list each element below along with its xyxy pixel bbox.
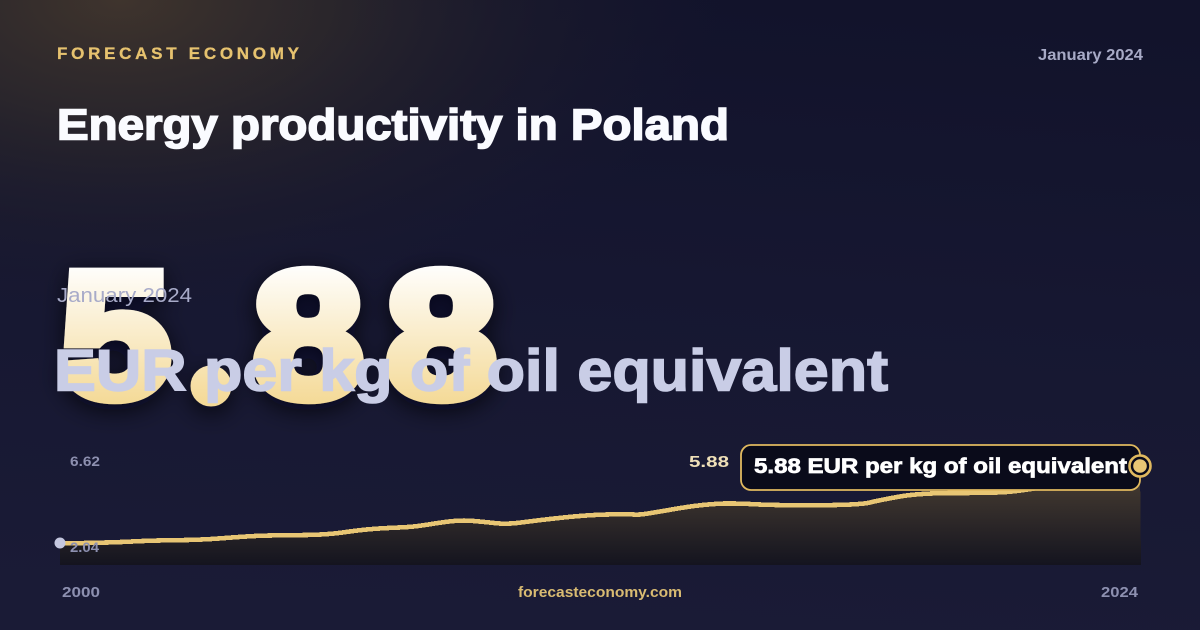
big value: 5 [60,235,171,436]
callout [741,445,1140,490]
x axis start: 2000 [62,584,100,601]
date top right: January 2024 [1038,47,1143,64]
date overlay: January 2024 [57,285,192,307]
big value [60,235,497,436]
unit label: EUR per kg of oil equivalent [54,338,888,404]
big value: . [201,328,221,408]
title: Energy productivity in Poland [57,100,729,150]
site url: forecasteconomy.com [518,584,682,601]
chart line [60,466,1140,544]
line chart [54,466,1141,565]
big value: 8 [253,235,364,436]
axis min label: 2.04 [70,539,99,555]
chart area [60,466,1141,565]
eyebrow: brand label: FORECAST ECONOMY [57,44,300,63]
callout text: 5.88 EUR per kg of oil equivalent [754,455,1127,478]
axis max label: 6.62 [70,453,100,469]
big value: 8 [386,235,497,436]
end point marker [1130,456,1150,476]
latest value label: 5.88 [689,454,729,471]
chart start dot [54,538,66,548]
x axis end: 2024 [1101,584,1139,601]
